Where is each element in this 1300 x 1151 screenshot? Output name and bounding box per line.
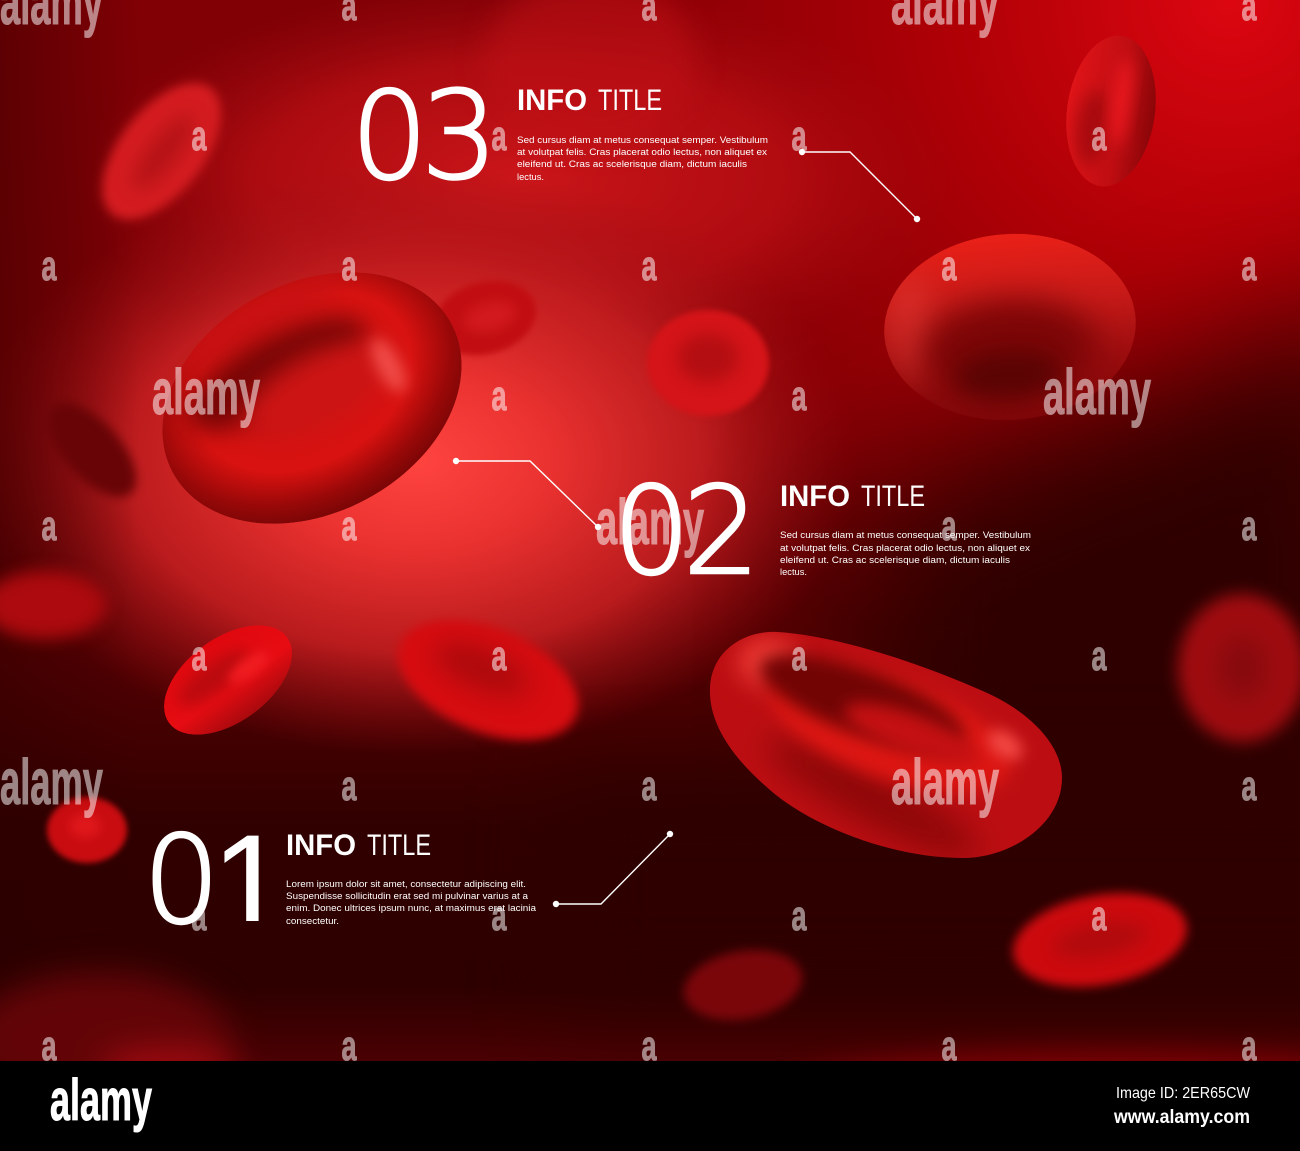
text 03: eleifend ut. Cras ac scelerisque diam, dictum iaculis (517, 159, 747, 170)
watermark overlay: a (192, 112, 207, 159)
cell: dark left (32, 388, 152, 512)
footer bar (0, 1061, 1300, 1151)
info block 03 (351, 66, 920, 222)
watermark overlay: a (642, 1022, 657, 1069)
number 01: 0 (143, 810, 220, 951)
watermark overlay: alamy (1043, 356, 1151, 428)
watermark overlay: a (42, 242, 57, 289)
leader line 03 (799, 149, 920, 222)
watermark overlay: a (492, 112, 507, 159)
cell: upper right (884, 234, 1136, 420)
watermark overlay: a (942, 1022, 957, 1069)
cell: mid centre (647, 310, 769, 416)
text 02: at volutpat felis. Cras placerat odio lectus, non aliquet ex (780, 543, 1030, 554)
text 02: Sed cursus diam at metus consequat semper. Vestibulum (780, 530, 1031, 541)
watermark overlay: a (342, 502, 357, 549)
cell: lower middle (678, 941, 808, 1029)
watermark overlay: a (792, 892, 807, 939)
text 02: lectus. (780, 567, 807, 578)
watermark overlay: a (342, 762, 357, 809)
number 01: 1 (211, 805, 289, 962)
text 03 (517, 135, 768, 183)
footer logo: alamy (50, 1068, 152, 1133)
watermark overlay: a (1242, 242, 1257, 289)
watermark overlay: a (1242, 502, 1257, 549)
cell: small lower left (164, 625, 292, 735)
watermark overlay: a (942, 242, 957, 289)
cell: large left (162, 272, 462, 524)
watermark overlay: a (792, 372, 807, 419)
watermark overlay: a (792, 632, 807, 679)
cell: top right (1066, 36, 1156, 186)
watermark overlay: a (642, 242, 657, 289)
cell: right edge (1178, 594, 1300, 742)
title 02: TITLE (861, 480, 925, 513)
watermark overlay: a (42, 502, 57, 549)
watermark overlay: a (192, 632, 207, 679)
cell: bottom left large (0, 972, 240, 1108)
cell: lower centre blurred (380, 596, 596, 764)
title 03 (517, 84, 662, 117)
watermark overlay: a (942, 502, 957, 549)
leader line 02 (453, 458, 601, 530)
cell: lower large right (710, 632, 1062, 858)
watermark overlay: a (1242, 762, 1257, 809)
title 02: INFO (780, 480, 850, 513)
text 01: Lorem ipsum dolor sit amet, consectetur adipiscing elit. (286, 879, 526, 890)
watermark overlay: alamy (891, 746, 999, 818)
title 03: TITLE (598, 84, 662, 117)
watermark overlay: a (192, 892, 207, 939)
text 01: Suspendisse sollicitudin erat sed mi pulvinar varius at a (286, 891, 529, 902)
watermark overlay: alamy (152, 356, 260, 428)
info block 02 (453, 458, 1031, 602)
number 02: 0 (613, 461, 690, 602)
watermark overlay: a (1242, 1022, 1257, 1069)
info block 01 (152, 830, 674, 926)
cell: behind large cell (425, 270, 545, 366)
text 01: enim. Donec ultrices ipsum nunc, at maximus erat lacinia (286, 903, 537, 914)
cell: small left (47, 797, 127, 863)
cell: top centre blurred (485, 0, 695, 145)
text 03: at volutpat felis. Cras placerat odio lectus, non aliquet ex (517, 147, 767, 158)
text 03: Sed cursus diam at metus consequat semper. Vestibulum (517, 135, 768, 146)
number 03: 3 (421, 66, 498, 207)
watermark overlay: alamy (596, 486, 704, 558)
title 03: INFO (517, 84, 587, 117)
number 03: 0 (351, 66, 428, 207)
watermark overlay: a (642, 762, 657, 809)
watermark overlay: a (492, 632, 507, 679)
footer image id: Image ID: 2ER65CW (1116, 1085, 1251, 1102)
watermark overlay: a (1092, 892, 1107, 939)
text 01: consectetur. (286, 916, 339, 927)
watermark overlay: alamy (0, 746, 103, 818)
number 02 (613, 461, 760, 602)
leader line 01 (553, 831, 673, 907)
cell: far left (0, 571, 107, 639)
text 02: eleifend ut. Cras ac scelerisque diam, dictum iaculis (780, 555, 1010, 566)
number 03 (351, 66, 498, 207)
title 01: TITLE (367, 829, 431, 862)
text 02 (780, 530, 1031, 578)
watermark overlay: a (1092, 112, 1107, 159)
text 01 (286, 879, 537, 927)
watermark overlay: a (42, 1022, 57, 1069)
title 01: INFO (286, 829, 356, 862)
watermark overlay: a (492, 372, 507, 419)
cell: top left (79, 62, 244, 240)
watermark overlay: a (492, 892, 507, 939)
cell: lower right (1006, 880, 1194, 1000)
watermark overlay: a (1092, 632, 1107, 679)
title 02 (780, 480, 925, 513)
text 03: lectus. (517, 172, 544, 183)
number 01 (152, 830, 259, 926)
watermark overlay: a (342, 1022, 357, 1069)
watermark overlay: a (342, 242, 357, 289)
footer url: www.alamy.com (1113, 1107, 1250, 1128)
title 01 (286, 829, 431, 862)
watermark overlay: a (792, 112, 807, 159)
number 02: 2 (683, 461, 760, 602)
